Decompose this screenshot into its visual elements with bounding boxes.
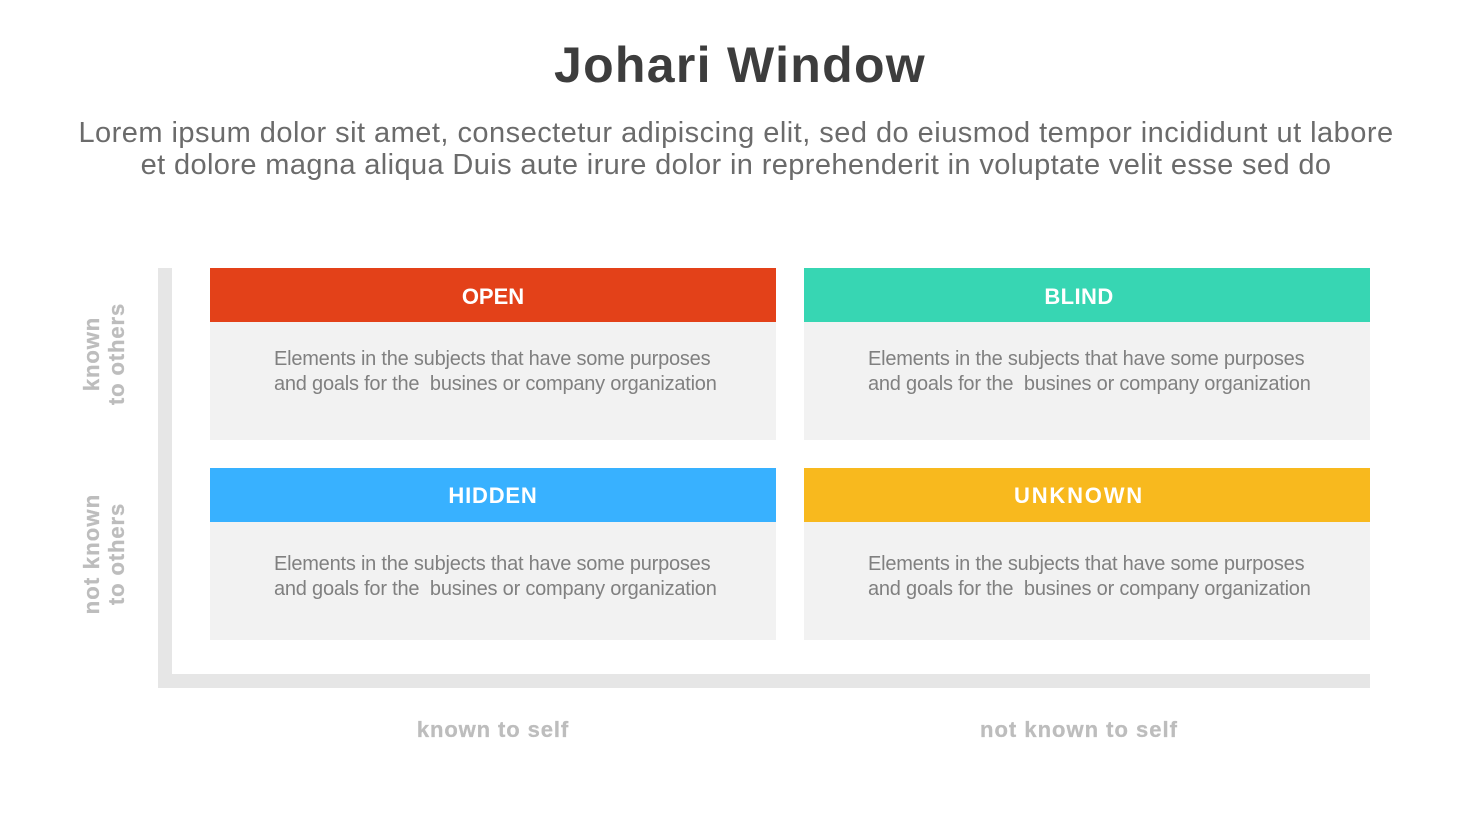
hidden body: and goals for the busines or company organization (274, 578, 717, 600)
subtitle text (78, 117, 1394, 181)
unknown body (804, 522, 1370, 640)
axis label: not known to others: to others (104, 503, 129, 605)
unknown body: and goals for the busines or company organization (868, 578, 1311, 600)
panel: unknown (804, 468, 1370, 640)
blind header (804, 268, 1370, 322)
axis label: known to others (79, 303, 129, 405)
blind header: BLIND (1044, 284, 1114, 309)
axis label: not known to others: not known (79, 494, 104, 614)
hidden header: HIDDEN (448, 483, 538, 508)
unknown body: Elements in the subjects that have some purposes (868, 553, 1304, 575)
open header: OPEN (462, 284, 524, 309)
open body: and goals for the busines or company organization (274, 373, 717, 395)
title: Johari Window (554, 37, 926, 93)
panel: blind (804, 268, 1370, 440)
panel: hidden (210, 468, 776, 640)
unknown header (804, 468, 1370, 522)
horizontal axis bar (158, 674, 1370, 688)
axis label: not known to others (79, 494, 129, 614)
hidden body (210, 522, 776, 640)
blind body: Elements in the subjects that have some purposes (868, 348, 1304, 370)
hidden header (210, 468, 776, 522)
subtitle text: Lorem ipsum dolor sit amet, consectetur adipiscing elit, sed do eiusmod tempor incididunt ut labore (78, 117, 1394, 149)
open header (210, 268, 776, 322)
hidden body: Elements in the subjects that have some purposes (274, 553, 710, 575)
axis label: not known to self: not known to self (980, 717, 1178, 742)
axis label: known to others: known (79, 317, 104, 391)
blind body (804, 322, 1370, 440)
axis label: known to others: to others (104, 303, 129, 405)
open body: Elements in the subjects that have some purposes (274, 348, 710, 370)
open body (210, 322, 776, 440)
subtitle text: et dolore magna aliqua Duis aute irure dolor in reprehenderit in voluptate velit esse sed do (141, 149, 1331, 181)
vertical axis bar (158, 268, 172, 688)
axis label: known to self: known to self (417, 717, 569, 742)
panel: open (210, 268, 776, 440)
blind body: and goals for the busines or company organization (868, 373, 1311, 395)
unknown header: UNKNOWN (1014, 483, 1144, 508)
